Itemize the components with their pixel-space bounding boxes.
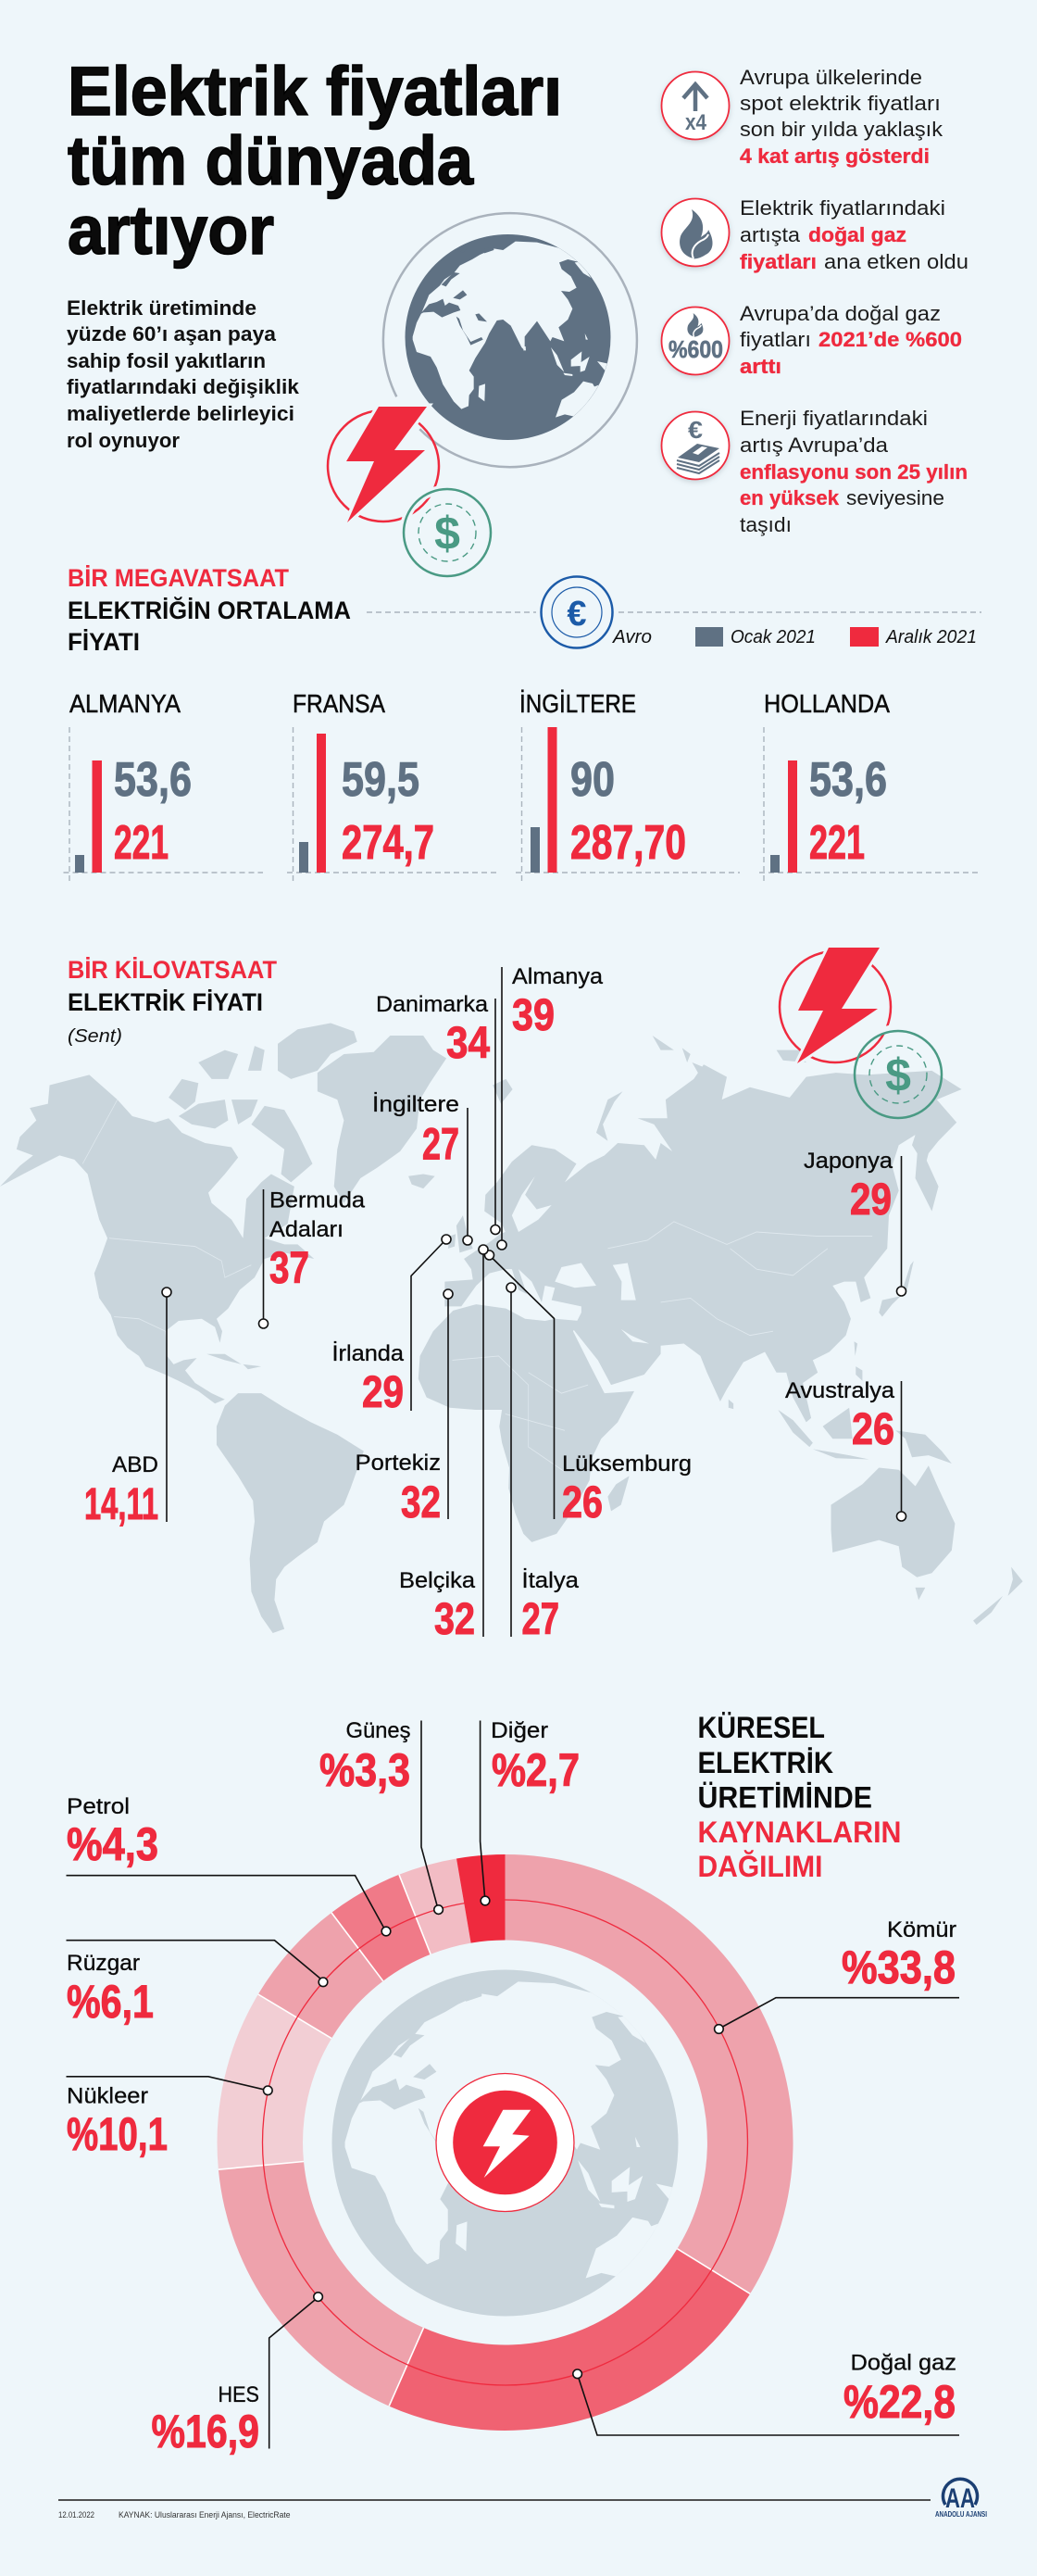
donut callout: wind <box>67 1941 328 2028</box>
map callout: Ireland: İrlanda <box>331 1341 405 1366</box>
bar chart: Netherlands: 221 <box>809 816 865 870</box>
donut heading <box>698 1711 902 1883</box>
map callout: Luxembourg: Lüksemburg <box>562 1451 692 1476</box>
segment: coal <box>506 1854 793 2293</box>
donut callout: natural gas <box>573 2351 959 2435</box>
donut callout: coal <box>715 1917 959 2033</box>
intro text block: yüzde 60’ı aşan paya <box>67 322 277 346</box>
heading: megawatt-hour price: BİR MEGAVATSAAT <box>68 564 289 592</box>
donut callout: oil: %4,3 <box>67 1818 158 1870</box>
donut callout: nuclear: Nükleer <box>67 2084 148 2108</box>
map callout: Denmark: 34 <box>446 1019 490 1068</box>
map callout: Luxembourg <box>485 1250 692 1527</box>
bar chart: United Kingdom: 287,70 <box>570 816 686 870</box>
map callout: Australia: 26 <box>852 1405 894 1454</box>
fact 3: gas up 600 percent: arttı <box>740 355 781 378</box>
bar chart: Germany: ALMANYA <box>69 689 181 718</box>
donut callout: hydro: %16,9 <box>152 2406 259 2457</box>
bar chart: United Kingdom <box>516 689 740 883</box>
map callout: Belgium <box>399 1245 488 1644</box>
donut chart: electricity sources <box>218 1854 793 2431</box>
map callout: USA: ABD <box>112 1452 158 1477</box>
footer: date and source: 12.01.2022 <box>58 2510 94 2519</box>
map callout: Bermuda: Bermuda <box>269 1187 366 1213</box>
fact 2: natural gas prices <box>661 196 968 273</box>
fact 4: inflation: Enerji fiyatlarındaki <box>740 407 928 430</box>
fact 3: gas up 600 percent: Avrupa’da doğal gaz <box>740 302 941 325</box>
logo: Anadolu Ajansi: ANADOLU AJANSI <box>935 2509 987 2519</box>
map callout: Australia: Avustralya <box>785 1378 895 1403</box>
map callout: Denmark: Danimarka <box>376 992 489 1017</box>
donut callout: solar <box>319 1718 443 1914</box>
donut callout: nuclear: %10,1 <box>67 2108 168 2160</box>
map callout: Italy: İtalya <box>522 1568 580 1593</box>
donut heading: ÜRETİMİNDE <box>698 1780 872 1814</box>
fact 4: inflation: en yüksek <box>740 486 840 509</box>
panel: key facts <box>661 66 968 536</box>
fact 4: inflation: seviyesine <box>846 486 944 509</box>
icon: map lightning bolt <box>780 948 891 1063</box>
icon: euro coin <box>541 576 613 648</box>
fact 2: natural gas prices: fiyatları <box>740 250 817 273</box>
segment: wind <box>258 1913 383 2039</box>
fact 4: inflation <box>661 407 968 536</box>
map callout: United Kingdom: 27 <box>422 1121 459 1169</box>
donut callout: natural gas: Doğal gaz <box>850 2351 956 2375</box>
intro text block <box>67 296 300 452</box>
donut callout: solar: Güneş <box>346 1718 411 1743</box>
icon: dollar coin <box>404 489 491 576</box>
fact 4: inflation: taşıdı <box>740 513 792 536</box>
map callout: Portugal <box>356 1289 453 1527</box>
fact 3: gas up 600 percent: 2021’de %600 <box>818 328 962 351</box>
map callout: Bermuda: 37 <box>269 1244 309 1293</box>
icon: map dollar coin <box>855 1028 942 1118</box>
segment: other <box>456 1854 506 1943</box>
segment: natural gas <box>389 2249 750 2431</box>
bar chart: France: 274,7 <box>342 816 434 870</box>
intro text block: rol oynuyor <box>67 429 180 452</box>
segment: solar <box>399 1858 471 1954</box>
donut callout: coal: Kömür <box>887 1917 956 1942</box>
icon: donut centre globe <box>331 1969 684 2316</box>
bar chart: France <box>287 689 496 883</box>
map callout: USA <box>84 1288 171 1529</box>
map callout: Germany: 39 <box>512 991 555 1040</box>
fact 1: four times increase: Avrupa ülkelerinde <box>740 66 922 89</box>
icon: lightning bolt with ring <box>328 407 439 522</box>
footer: date and source: KAYNAK: Uluslararası Enerji Ajansı, ElectricRate <box>119 2510 291 2519</box>
map callout: Denmark <box>376 992 500 1234</box>
icon: dollar coin: $ <box>434 508 460 559</box>
fact 4: inflation: € <box>688 416 703 444</box>
legend: Avro <box>612 627 652 647</box>
map callout: Portugal: 32 <box>401 1478 441 1527</box>
bar chart: Netherlands: 53,6 <box>809 753 887 807</box>
segment: nuclear <box>218 1994 331 2169</box>
logo: Anadolu Ajansi <box>935 2479 987 2519</box>
donut callout: oil: Petrol <box>67 1794 130 1819</box>
heading: megawatt-hour price: FİYATI <box>68 628 140 656</box>
donut heading: KÜRESEL <box>698 1711 825 1744</box>
icon: hero globe <box>383 213 637 467</box>
intro text block: fiyatlarındaki değişiklik <box>67 375 300 398</box>
footer: date and source <box>58 2500 931 2519</box>
fact 2: natural gas prices: Elektrik fiyatlarındaki <box>740 196 945 220</box>
legend <box>612 627 977 647</box>
donut callout: natural gas: %22,8 <box>843 2376 956 2428</box>
donut callout: other: Diğer <box>491 1718 548 1743</box>
heading: megawatt-hour price <box>68 564 351 656</box>
donut callout: coal: %33,8 <box>842 1941 956 1993</box>
heading: kilowatt-hour price: BİR KİLOVATSAAT <box>68 956 277 984</box>
bar chart: Germany <box>63 689 263 883</box>
legend: Aralık 2021 <box>885 627 977 647</box>
donut callout: solar: %3,3 <box>319 1744 410 1796</box>
donut callout: nuclear <box>67 2077 272 2160</box>
segment: oil <box>331 1875 431 1981</box>
bar chart: United Kingdom: 90 <box>570 753 615 807</box>
heading: kilowatt-hour price: ELEKTRİK FİYATI <box>68 988 263 1016</box>
fact 1: four times increase: son bir yılda yaklaşık <box>740 118 943 141</box>
intro text block: Elektrik üretiminde <box>67 296 256 320</box>
title: Elektrik fiyatları <box>68 53 562 130</box>
fact 1: four times increase: 4 kat artış gösterdi <box>740 145 930 168</box>
icon: euro coin: € <box>567 595 587 634</box>
donut callout: oil <box>67 1794 391 1936</box>
map callout: Ireland: 29 <box>362 1368 404 1417</box>
intro text block: sahip fosil yakıtların <box>67 349 266 372</box>
segment: hydro <box>219 2162 424 2406</box>
icon: map dollar coin: $ <box>885 1049 911 1101</box>
donut heading: DAĞILIMI <box>698 1850 822 1883</box>
fact 2: natural gas prices: doğal gaz <box>808 223 906 246</box>
fact 4: inflation: enflasyonu son 25 yılın <box>740 460 968 484</box>
donut callout: wind: %6,1 <box>67 1976 154 2028</box>
map callout: Italy: 27 <box>522 1595 559 1644</box>
intro text block: maliyetlerde belirleyici <box>67 402 294 425</box>
bar chart: France: FRANSA <box>293 689 385 718</box>
bar chart: Netherlands <box>759 689 981 883</box>
fact 3: gas up 600 percent: fiyatları <box>740 328 811 351</box>
donut callout: wind: Rüzgar <box>67 1951 140 1976</box>
map callout: Bermuda: Adaları <box>269 1217 344 1242</box>
map callout: Japan: Japonya <box>804 1149 893 1174</box>
fact 3: gas up 600 percent <box>661 302 962 378</box>
logo: Anadolu Ajansi: AA <box>945 2483 975 2514</box>
donut callout: other <box>481 1718 580 1905</box>
fact 1: four times increase: spot elektrik fiyatları <box>740 92 941 115</box>
map callout: Japan <box>804 1149 906 1296</box>
donut callout: hydro: HES <box>219 2382 259 2407</box>
map callout: Ireland <box>331 1235 451 1417</box>
bar chart: Germany: 53,6 <box>114 753 192 807</box>
map callout: United Kingdom <box>372 1092 472 1245</box>
bar chart: United Kingdom: İNGİLTERE <box>519 689 636 718</box>
map callout: Portugal: Portekiz <box>356 1451 441 1476</box>
map callout: Bermuda <box>259 1187 366 1328</box>
map callout: Luxembourg: 26 <box>562 1478 603 1527</box>
map callout: United Kingdom: İngiltere <box>372 1092 459 1117</box>
donut heading: ELEKTRİK <box>698 1746 833 1779</box>
icon: centre lightning badge <box>436 2073 574 2212</box>
heading: kilowatt-hour price <box>68 956 277 1047</box>
map callout: USA: 14,11 <box>84 1480 158 1529</box>
heading: megawatt-hour price: ELEKTRİĞİN ORTALAMA <box>68 596 351 624</box>
bar chart: France: 59,5 <box>342 753 419 807</box>
world map <box>0 1024 1023 1633</box>
title <box>68 53 562 269</box>
heading: kilowatt-hour price: (Sent) <box>68 1026 122 1047</box>
title: tüm dünyada <box>68 122 474 199</box>
map callout: Italy <box>506 1283 580 1644</box>
map callout: Australia <box>785 1378 906 1521</box>
map callout: Germany: Almanya <box>512 964 604 989</box>
donut callout: other: %2,7 <box>492 1744 580 1796</box>
fact 2: natural gas prices: artışta <box>740 223 801 246</box>
bar chart: Netherlands: HOLLANDA <box>764 689 890 718</box>
map callout: Japan: 29 <box>850 1175 892 1225</box>
map callout: Germany <box>497 964 604 1250</box>
fact 1: four times increase <box>661 66 943 168</box>
fact 1: four times increase: x4 <box>685 110 707 135</box>
map callout: Belgium: Belçika <box>399 1568 476 1593</box>
legend: Ocak 2021 <box>731 627 816 647</box>
fact 4: inflation: artış Avrupa’da <box>740 434 889 457</box>
title: artıyor <box>68 192 274 269</box>
fact 2: natural gas prices: ana etken oldu <box>824 250 968 273</box>
bar chart: Germany: 221 <box>114 816 169 870</box>
donut callout: hydro <box>152 2293 322 2457</box>
map callout: Belgium: 32 <box>434 1595 475 1644</box>
donut heading: KAYNAKLARIN <box>698 1816 902 1849</box>
fact 3: gas up 600 percent: %600 <box>668 335 723 363</box>
